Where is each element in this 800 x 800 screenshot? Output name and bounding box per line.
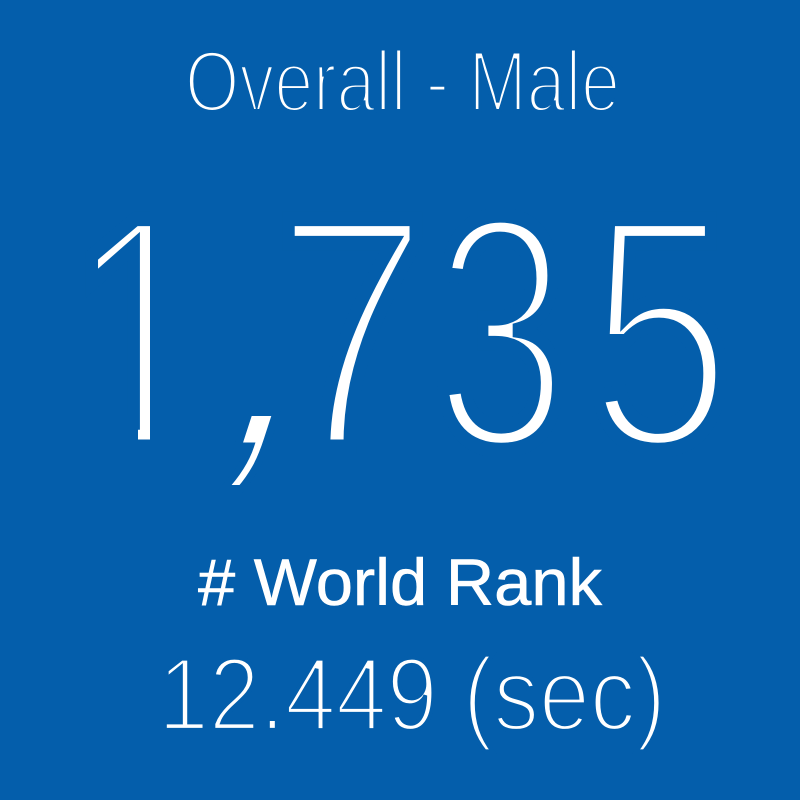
big rank number: 7 xyxy=(274,147,430,518)
big rank number: 1 xyxy=(66,147,216,518)
label: world rank: # World Rank xyxy=(198,545,603,619)
time value: 12.449 (sec) xyxy=(158,637,666,753)
big rank number: 5 xyxy=(588,147,732,518)
big rank number: , xyxy=(188,148,388,518)
title: Overall - Male xyxy=(185,34,620,130)
big rank number: 3 xyxy=(434,147,568,518)
big rank number xyxy=(66,147,732,518)
